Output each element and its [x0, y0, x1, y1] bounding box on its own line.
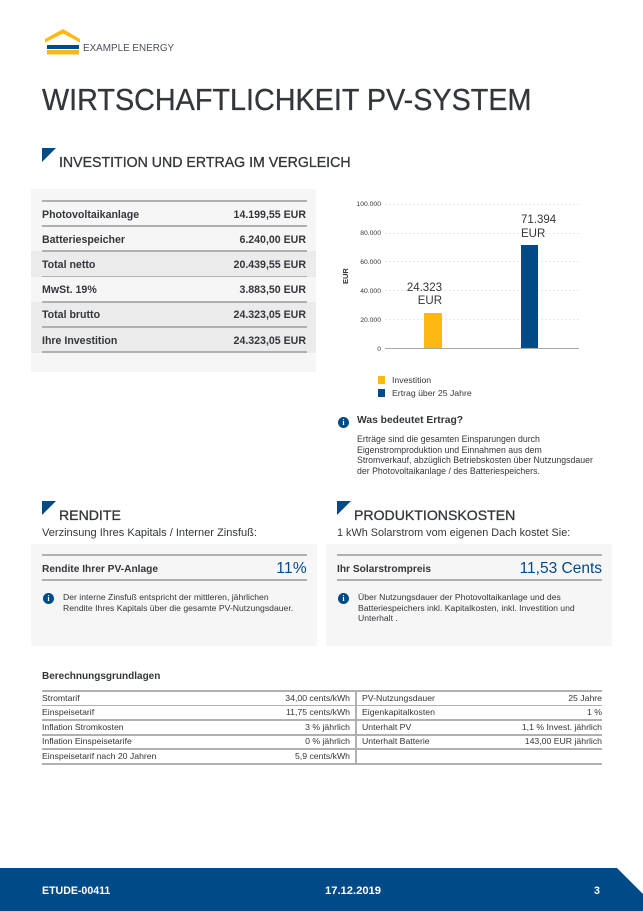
- subheading: Verzinsung Ihres Kapitals / Interner Zinsfuß:: [42, 527, 257, 539]
- panel: investment table: [31, 189, 316, 372]
- row: [42, 707, 350, 717]
- row: Batteriespeicher: [42, 234, 306, 246]
- heading text: INVESTITION UND ERTRAG IM VERGLEICH: [59, 155, 351, 171]
- heading: PRODUKTIONSKOSTEN: [354, 507, 515, 523]
- row: Einspeisetarif: [42, 707, 94, 717]
- row: [362, 693, 602, 703]
- row: Ihre Investition: 24.323,05 EUR: [234, 335, 306, 347]
- row: Total brutto: Total brutto: [42, 309, 100, 321]
- row: Total brutto: 24.323,05 EUR: [234, 309, 306, 321]
- callout text: [357, 434, 593, 476]
- row: PV-Nutzungsdauer: [362, 693, 435, 703]
- value label: Ertrag: [521, 214, 557, 240]
- logo: [45, 29, 174, 54]
- row: Stromtarif: [42, 693, 80, 703]
- row: [42, 751, 350, 761]
- footer: date: 17.12.2019: [325, 885, 381, 897]
- y axis labels: 20.000: [360, 317, 381, 324]
- row: MwSt: 3.883,50 EUR: [239, 284, 306, 296]
- y axis labels: 0: [377, 346, 381, 353]
- value label: Investition: [407, 282, 442, 307]
- panel background: [31, 544, 317, 646]
- note: Batteriespeichers inkl. Kapitalkosten, inkl. Investition und: [358, 603, 575, 613]
- row: Ihre Investition: Ihre Investition: [42, 335, 117, 347]
- subheading: 1 kWh Solarstrom vom eigenen Dach kostet Sie:: [337, 527, 570, 539]
- icon: corner triangle: [42, 148, 56, 162]
- title: WIRTSCHAFTLICHKEIT PV-SYSTEM: [42, 83, 532, 117]
- row: Unterhalt Batterie: [362, 736, 430, 746]
- y axis labels: 80.000: [360, 230, 381, 237]
- note: Der interne Zinsfuß entspricht der mittleren, jährlichen: [63, 592, 269, 602]
- legend: Investition: Investition: [392, 375, 431, 385]
- value label: Ertrag: 71.394: [521, 214, 557, 226]
- callout heading: Was bedeutet Ertrag?: [357, 415, 463, 426]
- row: Einspeisetarif nach 20 Jahren: [42, 751, 156, 761]
- callout text: Eigenstromproduktion und Einnahmen aus dem: [357, 445, 542, 455]
- icon: info: i: [342, 418, 345, 427]
- note: Unterhalt .: [358, 613, 398, 623]
- row: 1,1 % Invest. jährlich: [522, 722, 602, 732]
- legend: Ertrag: Ertrag über 25 Jahre: [392, 388, 472, 398]
- value label: Investition: 24.323: [407, 282, 442, 294]
- footer: document id: ETUDE-00411: [42, 885, 110, 897]
- section heading: Investition und Ertrag: [42, 148, 351, 171]
- row: 5,9 cents/kWh: [295, 751, 350, 761]
- row: [42, 722, 350, 732]
- note: [63, 592, 293, 613]
- note: Rendite Ihres Kapitals über die gesamte PV-Nutzungsdauer.: [63, 603, 293, 613]
- row: Ihre Investition: [42, 335, 306, 347]
- y axis labels: 40.000: [360, 288, 381, 295]
- row: [362, 722, 602, 732]
- chart legend: [378, 375, 472, 398]
- row: 3 % jährlich: [305, 722, 350, 732]
- row: Batteriespeicher: Batteriespeicher: [42, 234, 125, 246]
- row: [42, 693, 350, 703]
- icon: info: [338, 593, 349, 604]
- callout text: Stromverkauf, abzüglich Betriebskosten über Nutzungsdauer: [357, 455, 593, 465]
- row: Total netto: Total netto: [42, 259, 95, 271]
- row: Total brutto: [42, 309, 306, 321]
- footer: [0, 868, 643, 912]
- row: 0 % jährlich: [305, 736, 350, 746]
- row: MwSt: [42, 284, 306, 296]
- row: Photovoltaikanlage: [42, 209, 306, 221]
- callout: Was bedeutet Ertrag: [338, 415, 593, 476]
- icon: info: [43, 593, 54, 604]
- icon: info: [338, 417, 349, 428]
- value label: Investition: EUR: [418, 295, 442, 307]
- row: [362, 707, 602, 717]
- y axis labels: 60.000: [360, 259, 381, 266]
- metric: Solarstrompreis: 11,53 Cents: [520, 560, 602, 577]
- footer: page number: 3: [594, 885, 600, 897]
- row: Total netto: [42, 259, 306, 271]
- row: [362, 736, 602, 746]
- panel: Produktionskosten: [326, 501, 612, 646]
- metric: Rendite: Rendite Ihrer PV-Anlage: [42, 564, 158, 575]
- row: Inflation Einspeisetarife: [42, 736, 132, 746]
- row: Batteriespeicher: 6.240,00 EUR: [239, 234, 306, 246]
- bar chart: [341, 201, 579, 353]
- row: 25 Jahre: [568, 693, 602, 703]
- callout text: der Photovoltaikanlage / des Batteriespeichers.: [357, 466, 540, 476]
- row: Unterhalt PV: [362, 722, 411, 732]
- value label: Ertrag: EUR: [521, 228, 545, 240]
- heading: Berechnungsgrundlagen: Berechnungsgrundlagen: [42, 671, 160, 682]
- panel: Rendite: [31, 501, 317, 646]
- note: Über Nutzungsdauer der Photovoltaikanlage und des: [358, 592, 561, 602]
- icon: house roof and bars: [45, 29, 80, 54]
- metric: Rendite: 11%: [276, 560, 307, 577]
- row: Photovoltaikanlage: Photovoltaikanlage: [42, 209, 139, 221]
- company name: EXAMPLE ENERGY: [83, 43, 174, 54]
- bar: Investition: [424, 313, 442, 348]
- icon: corner triangle: [42, 501, 56, 515]
- row: Photovoltaikanlage: 14.199,55 EUR: [234, 209, 306, 221]
- heading: RENDITE: [59, 507, 121, 523]
- icon: info: i: [342, 594, 345, 603]
- metric: Rendite: [42, 560, 307, 577]
- row: [42, 736, 350, 746]
- row: Eigenkapitalkosten: [362, 707, 435, 717]
- row: MwSt: MwSt. 19%: [42, 284, 97, 296]
- highlighted rows lower: [31, 302, 316, 353]
- bar: Ertrag: [521, 245, 538, 348]
- row: Total netto: 20.439,55 EUR: [234, 259, 306, 271]
- row: 11,75 cents/kWh: [286, 707, 350, 717]
- metric: Solarstrompreis: [337, 560, 602, 577]
- row: Inflation Stromkosten: [42, 722, 124, 732]
- icon: corner triangle: [337, 501, 351, 515]
- row: 143,00 EUR jährlich: [525, 736, 602, 746]
- panel background: [326, 544, 612, 646]
- highlighted rows: [31, 251, 316, 277]
- table: calculation basis: [42, 690, 602, 765]
- row: 34,00 cents/kWh: [285, 693, 350, 703]
- note: [358, 592, 575, 623]
- y axis title: EUR: [341, 268, 350, 284]
- icon: info: i: [47, 594, 50, 603]
- y axis labels: [356, 201, 381, 353]
- metric: Solarstrompreis: Ihr Solarstrompreis: [337, 564, 431, 575]
- callout text: Erträge sind die gesamten Einsparungen durch: [357, 434, 540, 444]
- y axis labels: 100.000: [356, 201, 381, 208]
- row: 1 %: [587, 707, 602, 717]
